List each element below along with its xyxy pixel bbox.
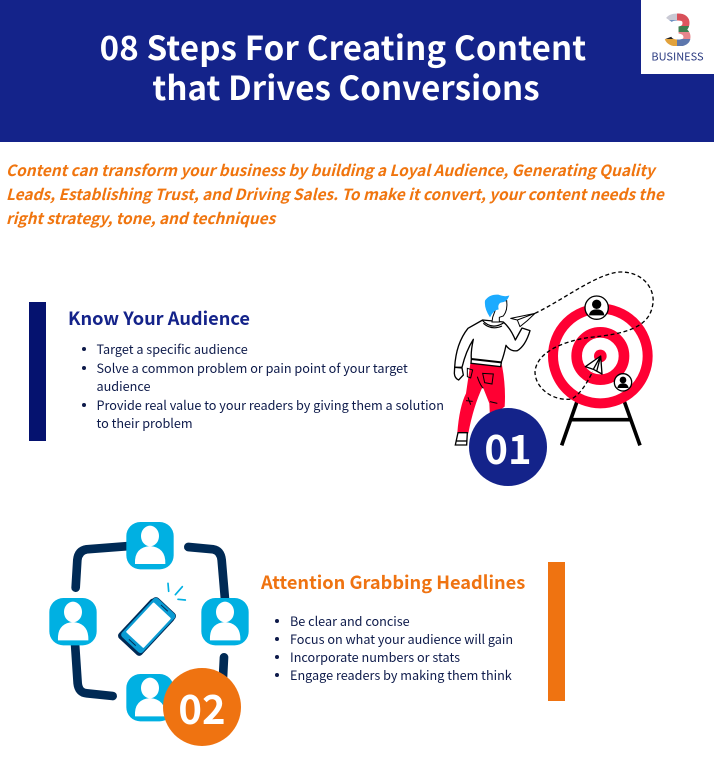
target rings: [553, 309, 648, 403]
list: step 2: Engage readers by making them think: [290, 665, 512, 684]
list: step 2: Focus on what your audience will gain: [290, 629, 513, 648]
panel: step 2 accent bar: [548, 562, 565, 701]
number badge 02: [163, 668, 241, 746]
heading: know your audience: Know Your Audience: [68, 305, 250, 331]
list: step 2: Incorporate numbers or stats: [290, 647, 460, 666]
list: step 1: to their problem: [96, 412, 193, 432]
list: step 1: [82, 339, 444, 432]
intro text: Content can transform your business by building a Loyal Audience, Generating Quality: [6, 159, 655, 181]
connecting lines: [75, 546, 225, 696]
list: step 1: Provide real value to your readers by giving them a solution: [96, 395, 444, 414]
title: 08 Steps For Creating Content: [100, 22, 586, 70]
shoe: [455, 433, 467, 445]
heading: attention grabbing headlines: Attention Grabbing Headlines: [261, 569, 525, 595]
title: that Drives Conversions: [152, 62, 540, 110]
avatar: lower: [614, 374, 632, 391]
intro text: [6, 159, 664, 229]
list: step 2: Be clear and concise: [290, 611, 410, 630]
header banner: [0, 0, 714, 142]
illustration: connected users around phone: [49, 522, 249, 722]
user tiles: [126, 522, 174, 569]
list: step 1: audience: [96, 376, 150, 394]
list: step 2: [275, 611, 513, 684]
illustration: person throwing paper plane at target: [454, 271, 654, 446]
number badge 01: 01: [484, 418, 532, 476]
avatar: top: [585, 296, 608, 319]
person: [454, 295, 535, 445]
head: [492, 301, 507, 322]
intro text: right strategy, tone, and techniques: [6, 207, 275, 229]
target stand: [562, 401, 640, 445]
phone signal marks: [168, 583, 185, 600]
hand plane: [511, 313, 535, 327]
phone: [117, 595, 178, 657]
list: step 1: Solve a common problem or pain point of your target: [96, 358, 408, 377]
hair: [485, 295, 509, 317]
trousers: [457, 361, 505, 433]
list: step 1: Target a specific audience: [96, 339, 248, 358]
number badge 02: 02: [178, 678, 226, 736]
sweater: [455, 320, 530, 367]
intro text: Leads, Establishing Trust, and Driving Sales. To make it convert, your content needs the: [6, 183, 664, 205]
dashed flight path: [535, 272, 653, 399]
logo: 3 Business: BUSINESS: [651, 48, 704, 64]
paper plane on target: [585, 356, 602, 374]
number badge 01: [469, 408, 547, 486]
logo: 3 Business: [641, 0, 714, 74]
panel: step 1 accent bar: [29, 302, 46, 441]
title: [100, 22, 586, 110]
